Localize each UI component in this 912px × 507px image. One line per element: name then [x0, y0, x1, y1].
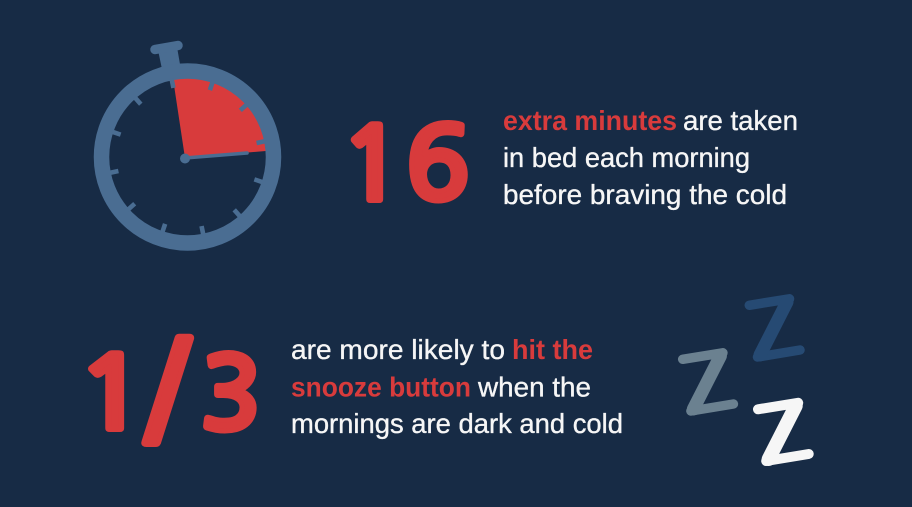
icon: stopwatch — [102, 46, 274, 243]
stat: 1/3 — [76, 328, 262, 454]
stat: 1/3: / — [144, 328, 193, 454]
text block: snooze button: snooze button — [291, 372, 471, 402]
icon: blue Z — [749, 299, 800, 357]
text block: extra minutes — [503, 105, 798, 210]
text block: extra minutes: before braving the cold — [503, 179, 787, 210]
stat: 16: 16 — [340, 116, 470, 216]
stat: 1/3: 1 — [76, 345, 148, 445]
icon: sleeping Z letters — [683, 299, 809, 461]
stopwatch crown — [155, 46, 181, 74]
text block: snooze button: when the — [477, 372, 591, 402]
text block: snooze button: hit the — [512, 334, 593, 365]
text block: snooze button: mornings are dark and cold — [291, 408, 623, 439]
stat: 1/3: 3 — [200, 346, 262, 446]
text block: snooze button: are more likely to — [291, 334, 505, 365]
icon: white Z — [758, 403, 809, 461]
icon: grey Z — [683, 353, 733, 411]
stopwatch hand — [180, 153, 247, 164]
text block: extra minutes: are taken — [683, 105, 798, 136]
text block: extra minutes: in bed each morning — [503, 142, 750, 173]
stopwatch ring — [102, 71, 274, 243]
text block: extra minutes: extra minutes — [503, 105, 677, 136]
text block: snooze button — [291, 334, 623, 439]
stopwatch tick marks — [109, 79, 266, 235]
red elapsed time wedge — [173, 77, 266, 158]
